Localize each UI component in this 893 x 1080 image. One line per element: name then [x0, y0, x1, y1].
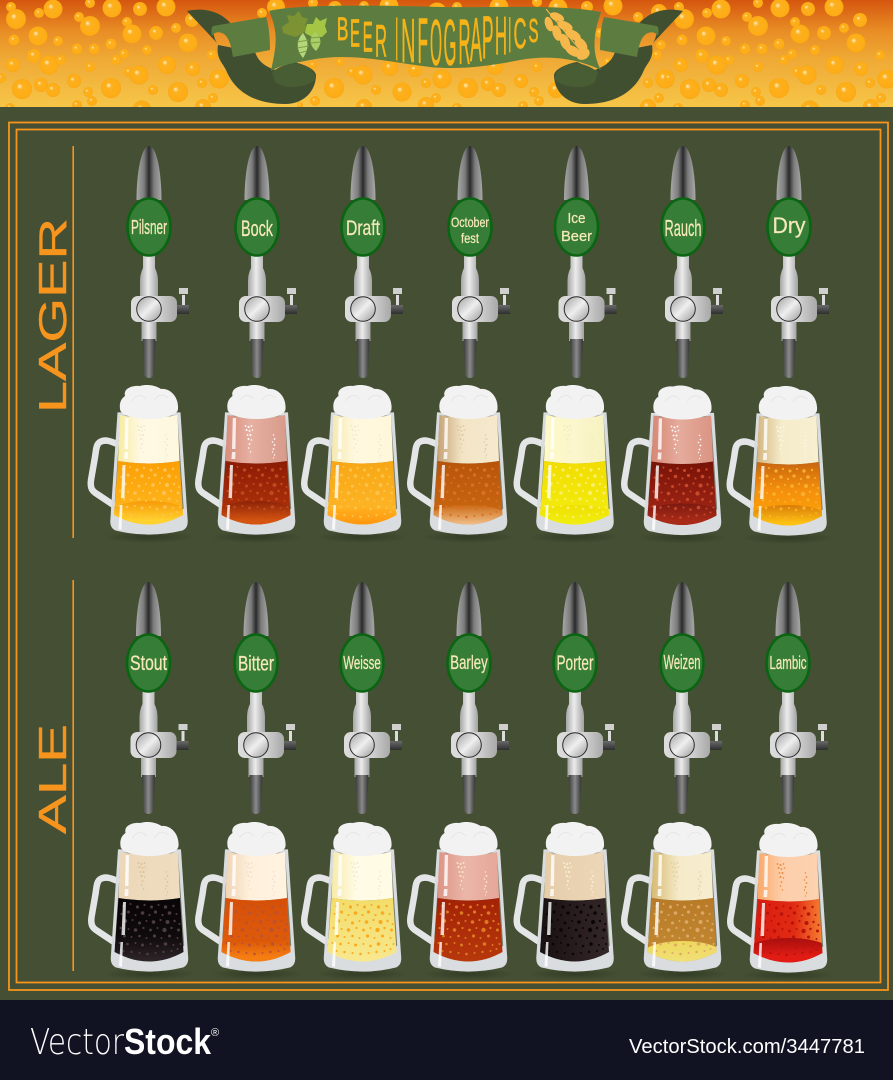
section divider line — [72, 580, 74, 971]
title: R — [458, 6, 470, 78]
tap: Weizen: Weizen — [664, 652, 700, 674]
tap: Bitter — [234, 582, 296, 814]
tap: October fest: fest — [461, 230, 479, 246]
tap: Porter — [554, 582, 615, 814]
mug: Bock — [198, 385, 302, 543]
mug: Barley — [410, 822, 514, 980]
mug: Lambic — [730, 823, 834, 981]
title: I — [395, 5, 398, 73]
tap: Pilsner — [128, 146, 189, 378]
mug: Bitter — [198, 822, 302, 980]
image id: VectorStock.com/3447781 — [629, 1036, 865, 1058]
tap: Weisse: Weisse — [343, 653, 381, 673]
panel: lager — [32, 146, 834, 544]
panel: ale — [32, 580, 834, 981]
tap: Dry: Dry — [772, 213, 806, 238]
tap: Bock — [236, 146, 297, 378]
tap: Ice Beer: Ice — [568, 210, 586, 227]
title: P — [482, 4, 494, 71]
icon: hops — [282, 11, 327, 58]
tap: Barley: Barley — [450, 653, 488, 674]
title: B — [337, 11, 348, 47]
tap: Barley — [448, 582, 509, 814]
tap: Draft — [342, 146, 403, 378]
tap: Lambic — [766, 582, 828, 814]
tap: Bock: Bock — [241, 216, 274, 241]
tap: Porter: Porter — [556, 652, 594, 675]
title: F — [418, 5, 428, 77]
mug: Stout — [91, 822, 196, 980]
title: G — [444, 6, 456, 79]
tap: Weizen — [660, 582, 722, 814]
title: I — [508, 7, 512, 63]
mug: Ice Beer — [517, 385, 621, 543]
tap: Lambic: Lambic — [770, 653, 806, 673]
logo: VectorStock: Vector — [30, 1022, 124, 1063]
title: A — [470, 6, 482, 75]
tap: October fest — [448, 146, 510, 378]
header: beer bubbles band — [0, 0, 893, 107]
title: C — [514, 10, 526, 58]
title: N — [401, 7, 416, 76]
banner with title: S — [528, 12, 538, 49]
tap: Draft: Draft — [346, 217, 380, 240]
heading: lager: LAGER — [32, 218, 75, 413]
tap: Pilsner: Pilsner — [131, 217, 167, 239]
double orange frame — [9, 122, 888, 990]
tap: Dry — [768, 146, 829, 378]
title: E — [350, 13, 360, 56]
logo: VectorStock: ® — [211, 1027, 219, 1039]
tap: Bitter: Bitter — [238, 652, 274, 676]
mug: Draft — [304, 385, 408, 543]
mug: Dry — [730, 386, 834, 544]
icon: wheat ear — [543, 9, 592, 62]
mug: Porter — [517, 822, 621, 980]
mug: Weisse — [304, 822, 408, 980]
tap: October fest: October — [451, 214, 489, 230]
tap: Rauch — [662, 146, 723, 378]
banner with title — [187, 4, 683, 104]
section divider line — [72, 146, 74, 538]
tap: Stout: Stout — [130, 652, 167, 675]
tap: Weisse — [340, 582, 402, 814]
mug: October fest — [410, 385, 514, 543]
tap: Stout — [127, 582, 188, 814]
footer bar — [0, 1000, 893, 1080]
title: E — [363, 14, 373, 62]
mug: Rauch — [624, 386, 728, 544]
tap: Ice Beer — [555, 146, 616, 378]
title: H — [495, 6, 507, 66]
tap: Ice Beer: Beer — [561, 228, 592, 245]
logo: VectorStock: Stock — [124, 1021, 212, 1062]
mug: Pilsner — [91, 385, 195, 543]
mug: Weizen — [624, 822, 728, 980]
title: R — [375, 16, 387, 67]
tap: Rauch: Rauch — [664, 215, 702, 241]
title: O — [430, 6, 442, 79]
heading: ale: ALE — [32, 724, 75, 834]
